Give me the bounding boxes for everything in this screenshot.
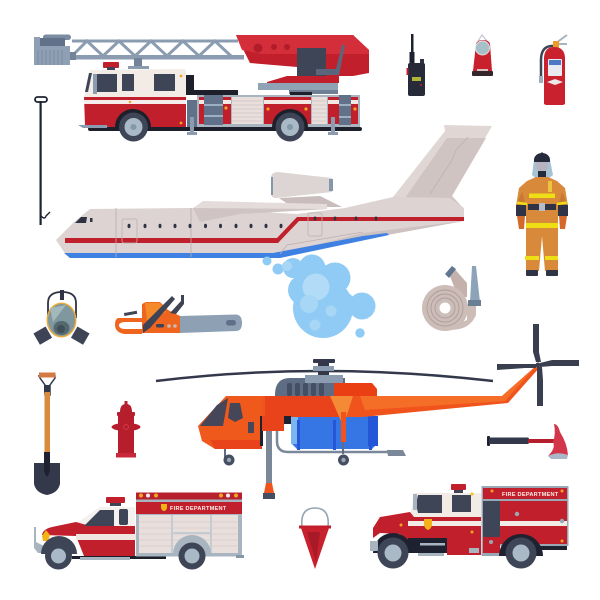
icon: fire extinguisher xyxy=(539,35,567,105)
icon: fire hydrant xyxy=(112,401,140,458)
icon: fire bucket xyxy=(299,508,331,569)
icon: shovel xyxy=(34,372,60,495)
turntable boom xyxy=(236,35,369,94)
orange pylon xyxy=(330,396,353,442)
rear body xyxy=(482,486,568,556)
wheels xyxy=(370,533,536,568)
tail fin xyxy=(370,125,492,210)
label: fire department: FIRE DEPARTMENT xyxy=(170,506,227,512)
icon: fire axe xyxy=(487,424,568,459)
cab xyxy=(373,484,481,556)
skid and wheels xyxy=(224,431,406,466)
firefighter xyxy=(516,152,568,276)
engine nacelle xyxy=(271,172,342,207)
tail boom and fuselage xyxy=(198,365,540,449)
wing xyxy=(193,201,327,222)
water tank xyxy=(291,416,378,450)
water splash xyxy=(262,254,376,338)
icon: chainsaw xyxy=(115,295,242,334)
icon: walkie-talkie radio xyxy=(406,34,425,96)
main rotor xyxy=(156,359,493,381)
ladder fire truck xyxy=(34,34,369,142)
wheels xyxy=(41,536,206,570)
icon: fire hose coil with nozzle xyxy=(422,266,481,331)
cab xyxy=(34,497,136,560)
engine housing xyxy=(275,375,377,396)
wheels xyxy=(115,109,308,142)
helicopter xyxy=(156,324,579,499)
snorkel xyxy=(263,431,275,499)
icon: red lantern xyxy=(472,35,493,76)
water-bomber airplane xyxy=(56,125,492,258)
label: fire department: FIRE DEPARTMENT xyxy=(502,492,559,498)
pickup fire truck xyxy=(34,492,244,570)
fire engine truck xyxy=(370,484,568,568)
utility box xyxy=(72,492,244,559)
cockpit window and cabin windows xyxy=(75,216,377,228)
icon: fire hook tool xyxy=(35,97,50,225)
icon: gas mask xyxy=(33,290,90,345)
aerial ladder xyxy=(34,34,244,65)
fuselage xyxy=(56,197,464,258)
rear body xyxy=(88,75,362,135)
cab xyxy=(78,58,186,128)
tail rotor xyxy=(497,324,579,406)
